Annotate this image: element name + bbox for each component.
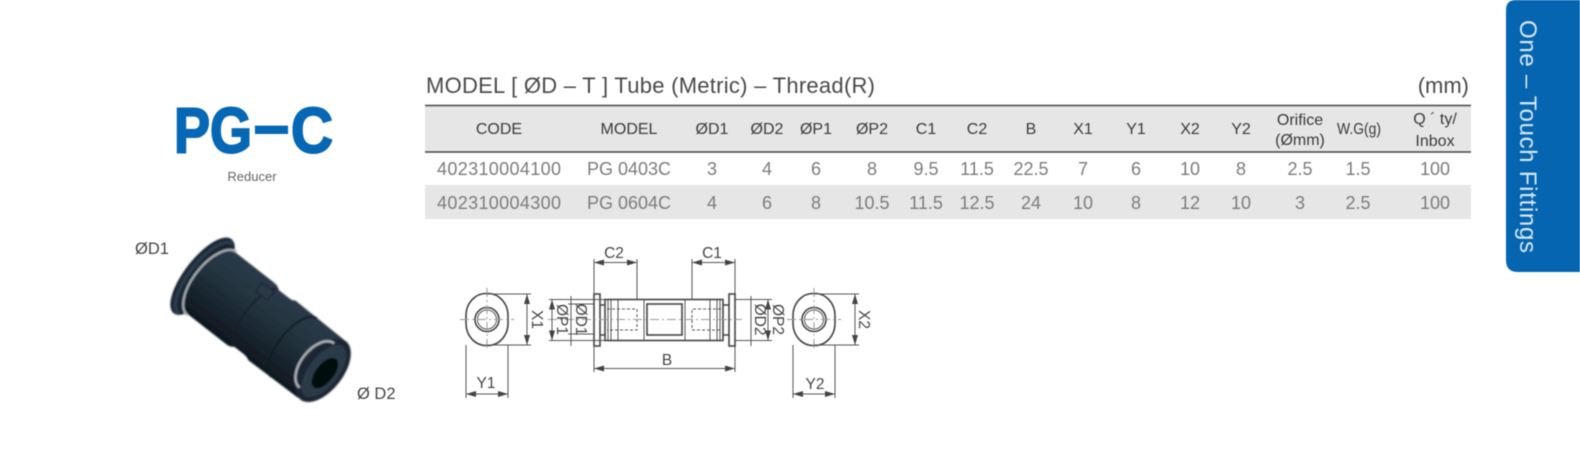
dimensions C2, C1, B: C1 <box>702 245 722 262</box>
table row: PG 0604C: 8 <box>811 193 821 213</box>
table row: PG 0403C: 100 <box>1420 159 1450 179</box>
unit label: (mm) <box>1418 73 1469 98</box>
fitting side view <box>548 294 742 346</box>
left end view with X1 and Y1 dimensions: Y1 <box>477 375 495 392</box>
diameter dimensions left: ØD1 <box>572 304 589 335</box>
table row: PG 0604C: 402310004300 <box>437 193 561 213</box>
product title: PG-C <box>174 89 333 166</box>
right end view with X2 and Y2 dimensions: Y2 <box>806 376 824 393</box>
right end view with X2 and Y2 dimensions <box>787 288 872 398</box>
table header row: ØD1 <box>696 121 729 138</box>
specification table <box>425 105 1471 219</box>
table header row: Y2 <box>1231 121 1251 138</box>
dimensions C2, C1, B: B <box>662 352 672 369</box>
table header row: Q ´ ty/ <box>1413 111 1457 128</box>
table row: PG 0604C: 12 <box>1180 193 1200 213</box>
table row: PG 0403C: 3 <box>707 159 717 179</box>
table row: PG 0604C <box>437 193 1450 213</box>
table row: PG 0604C: 4 <box>707 193 717 213</box>
table row: PG 0604C: PG 0604C <box>587 193 671 213</box>
table header row: C1 <box>916 121 936 138</box>
table row: PG 0403C: 4 <box>762 159 772 179</box>
table header row <box>476 111 1457 150</box>
table row: PG 0604C: 8 <box>1131 193 1141 213</box>
table row: PG 0604C: 6 <box>762 193 772 213</box>
table header row: CODE <box>476 121 522 138</box>
table row: PG 0403C: 2.5 <box>1287 159 1313 179</box>
side tab: One-Touch Fittings <box>1506 0 1580 272</box>
table header row: W.G(g) <box>1337 121 1381 138</box>
diameter dimensions left: ØP1 <box>553 304 570 335</box>
table header row: X1 <box>1073 121 1093 138</box>
table header row: ØD2 <box>751 121 784 138</box>
diameter dimensions left <box>549 296 605 346</box>
table row: PG 0604C: 12.5 <box>959 193 995 213</box>
table row: PG 0403C: 22.5 <box>1013 159 1049 179</box>
table header band <box>425 105 1471 152</box>
product photo: reducer fitting <box>159 228 368 420</box>
table row: PG 0403C: 1.5 <box>1345 159 1371 179</box>
left end view with X1 and Y1 dimensions <box>460 288 545 398</box>
label: ØD1 on photo: ØD1 <box>135 240 169 258</box>
left end view with X1 and Y1 dimensions: X1 <box>528 310 545 329</box>
table row: PG 0604C: 3 <box>1295 193 1305 213</box>
table header row: B <box>1026 121 1036 138</box>
table row: PG 0604C: 10.5 <box>854 193 890 213</box>
product title: PG-C: PG <box>174 94 252 166</box>
right end view with X2 and Y2 dimensions: X2 <box>855 310 872 329</box>
table header row: X2 <box>1180 121 1200 138</box>
table row: PG 0604C: 10 <box>1231 193 1251 213</box>
table header row: Orifice <box>1277 112 1323 129</box>
table row: PG 0604C: 2.5 <box>1345 193 1371 213</box>
table header row: ØP1 <box>800 121 832 138</box>
subtitle: Reducer: Reducer <box>227 169 277 184</box>
table row: PG 0403C <box>437 159 1450 179</box>
table row: PG 0403C: 9.5 <box>913 159 939 179</box>
technical drawing <box>460 245 872 398</box>
table row: PG 0403C: 8 <box>867 159 877 179</box>
table row: PG 0403C: 10 <box>1180 159 1200 179</box>
table header row: Inbox <box>1415 133 1455 150</box>
table header row: (Ømm) <box>1275 132 1325 149</box>
table header row: Y1 <box>1126 121 1146 138</box>
table row: PG 0604C: 100 <box>1420 193 1450 213</box>
table row: PG 0403C: 6 <box>1131 159 1141 179</box>
product title: PG-C: C <box>291 94 333 166</box>
table row: PG 0604C: 11.5 <box>909 193 943 213</box>
alternate row band <box>425 185 1471 219</box>
dimensions C2, C1, B: C2 <box>604 245 624 262</box>
table row: PG 0403C: 7 <box>1078 159 1088 179</box>
diameter dimensions right <box>735 296 786 346</box>
table header row: ØP2 <box>856 121 888 138</box>
table row: PG 0403C: 11.5 <box>960 159 994 179</box>
table row: PG 0604C: 10 <box>1073 193 1093 213</box>
table row: PG 0403C: 6 <box>811 159 821 179</box>
table row: PG 0604C: 24 <box>1021 193 1041 213</box>
side tab: One-Touch Fittings: One – Touch Fittings <box>1514 20 1541 253</box>
label: ØD2 on photo: Ø D2 <box>357 385 396 403</box>
diameter dimensions right: ØP2 <box>769 304 786 335</box>
dimensions C2, C1, B <box>594 245 735 372</box>
diameter dimensions right: ØD2 <box>751 304 768 335</box>
table row: PG 0403C: 402310004100 <box>437 159 561 179</box>
table title: MODEL [ ØD – T ] Tube (Metric) – Thread(R) <box>426 73 875 98</box>
table header row: MODEL <box>601 121 658 138</box>
table row: PG 0403C: 8 <box>1236 159 1246 179</box>
table row: PG 0403C: PG 0403C <box>587 159 671 179</box>
product title: PG-C: – <box>254 89 289 161</box>
table header row: C2 <box>967 121 987 138</box>
